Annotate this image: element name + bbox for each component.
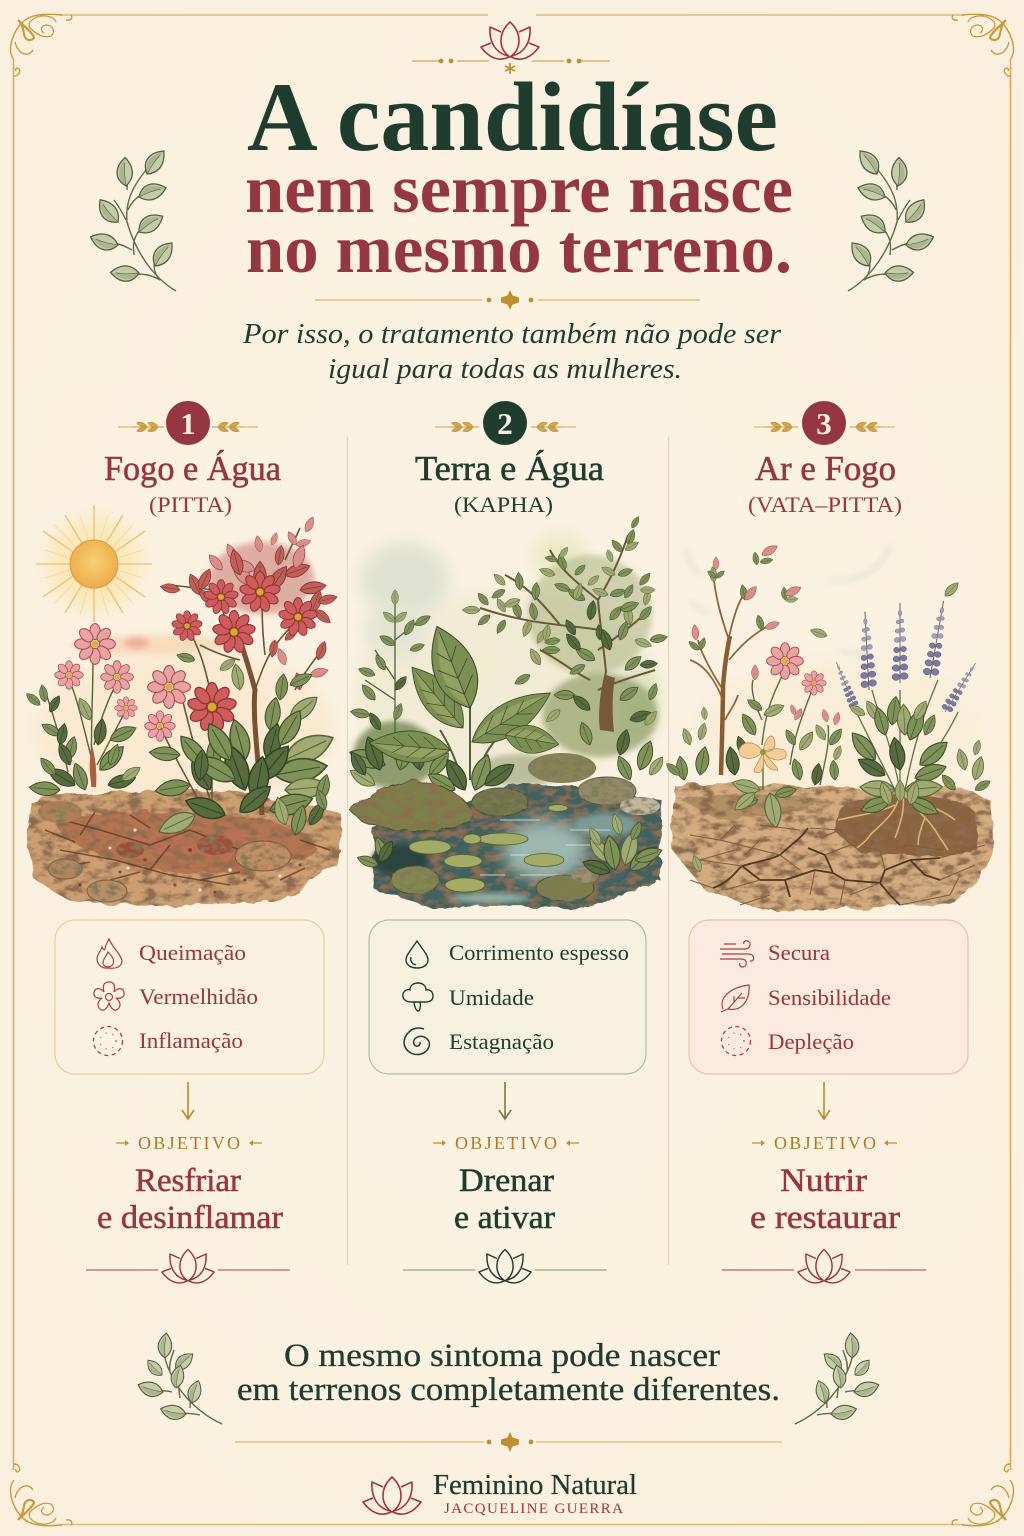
symptom text: Inflamação bbox=[139, 1028, 243, 1053]
objective text: e restaurar bbox=[750, 1200, 900, 1236]
icon: dotted circle bbox=[722, 1026, 750, 1056]
symptom text: Umidade bbox=[449, 985, 534, 1010]
panel: Fogo e Água bbox=[24, 401, 996, 1517]
symptoms box bbox=[689, 920, 968, 1074]
lily pads bbox=[409, 804, 568, 892]
roots bbox=[838, 795, 955, 850]
arrow bbox=[499, 1082, 511, 1119]
objective text bbox=[97, 1163, 283, 1236]
logo icon bbox=[363, 1477, 421, 1514]
number badge 2: 2 bbox=[497, 406, 513, 441]
illustration: hot red soil with sun and red flowers bbox=[24, 505, 342, 906]
panel: Ar e Fogo bbox=[137, 401, 996, 1517]
subheading: (PITTA) bbox=[149, 492, 232, 517]
icon: wind bbox=[720, 941, 754, 967]
closing statement: O mesmo sintoma pode nascer bbox=[284, 1338, 720, 1374]
objective text: Drenar bbox=[459, 1163, 554, 1199]
objective label: OBJETIVO bbox=[138, 1133, 240, 1153]
objective text bbox=[750, 1163, 900, 1236]
number badge 1 bbox=[118, 401, 258, 445]
symptoms box bbox=[369, 920, 646, 1074]
number badge 3 bbox=[754, 401, 895, 445]
left plant bbox=[24, 624, 143, 797]
symptoms box bbox=[55, 920, 324, 1074]
subheading: (VATA–PITTA) bbox=[748, 492, 902, 517]
lotus divider bbox=[403, 1250, 607, 1283]
heading: Fogo e Água bbox=[104, 449, 281, 488]
title divider bbox=[315, 290, 700, 310]
wind wisps bbox=[685, 545, 890, 654]
objective text: Nutrir bbox=[780, 1163, 867, 1199]
icon: cloud bbox=[403, 983, 433, 1011]
illustration: cracked dry soil with lavender bbox=[664, 543, 996, 910]
sun bbox=[36, 505, 152, 622]
number badge 3: 3 bbox=[816, 406, 832, 441]
icon: drop bbox=[406, 941, 428, 968]
arrow bbox=[818, 1082, 830, 1119]
arrow bbox=[182, 1082, 194, 1119]
objective label bbox=[116, 1133, 262, 1153]
symptom text: Depleção bbox=[768, 1029, 854, 1054]
subtitle: Por isso, o tratamento também não pode ser bbox=[242, 318, 782, 350]
sprig: bottom left bbox=[137, 1333, 222, 1424]
subtitle bbox=[242, 318, 782, 385]
symptom text: Vermelhidão bbox=[139, 984, 258, 1009]
author name: JACQUELINE GUERRA bbox=[444, 1501, 623, 1517]
heading: Terra e Água bbox=[415, 449, 604, 488]
panel: Terra e Água bbox=[137, 401, 996, 1517]
icon: dotted circle bbox=[94, 1026, 122, 1056]
symptom text: Corrimento espesso bbox=[449, 940, 629, 965]
big leaves bbox=[368, 619, 561, 796]
symptom text: Estagnação bbox=[449, 1029, 554, 1054]
fern bbox=[347, 590, 453, 790]
number badge 2 bbox=[435, 401, 576, 445]
symptom text: Queimação bbox=[139, 940, 246, 965]
number badge 1: 1 bbox=[180, 406, 196, 441]
footer divider bbox=[235, 1432, 782, 1452]
closing statement: em terrenos completamente diferentes. bbox=[237, 1372, 780, 1408]
flowering tree bbox=[145, 515, 338, 840]
rocks and moss bbox=[352, 753, 660, 901]
subheading: (KAPHA) bbox=[454, 492, 553, 517]
back foliage bbox=[353, 555, 658, 789]
title: nem sempre nasce bbox=[245, 151, 793, 227]
flowering plants bbox=[731, 643, 845, 829]
illustration: pond with lush plants bbox=[347, 515, 668, 908]
objective label: OBJETIVO bbox=[455, 1133, 557, 1153]
objective text: e ativar bbox=[454, 1200, 555, 1236]
lavender bbox=[832, 599, 992, 819]
subtitle: igual para todas as mulheres. bbox=[328, 353, 682, 385]
icon: flower bbox=[94, 982, 124, 1010]
sprig: right of title bbox=[848, 146, 935, 291]
tree bbox=[462, 515, 668, 782]
top lotus ornament bbox=[412, 22, 610, 74]
objective label bbox=[433, 1133, 579, 1153]
logo bbox=[363, 1469, 637, 1517]
slender tree bbox=[664, 543, 803, 781]
symptom text: Sensibilidade bbox=[768, 985, 891, 1010]
objective text: Resfriar bbox=[135, 1163, 241, 1199]
soil bbox=[28, 789, 342, 906]
objective text bbox=[454, 1163, 555, 1236]
column dividers bbox=[348, 437, 668, 1265]
lotus divider bbox=[86, 1250, 290, 1283]
brand name: Feminino Natural bbox=[433, 1469, 637, 1501]
water plants bbox=[356, 812, 664, 878]
title: A candidíase bbox=[247, 63, 778, 172]
symptom text: Secura bbox=[768, 940, 830, 965]
objective text: e desinflamar bbox=[97, 1200, 283, 1236]
sprig: bottom right bbox=[795, 1333, 880, 1424]
icon: flame bbox=[97, 939, 122, 968]
windblown leaves bbox=[690, 580, 961, 873]
title: no mesmo terreno. bbox=[246, 211, 792, 287]
objective label: OBJETIVO bbox=[774, 1133, 876, 1153]
heading: Ar e Fogo bbox=[755, 449, 896, 488]
title bbox=[245, 63, 793, 287]
closing statement bbox=[237, 1338, 780, 1408]
sprig: left of title bbox=[89, 146, 176, 291]
soil bbox=[672, 784, 996, 910]
icon: spiral bbox=[404, 1028, 429, 1055]
icon: leaf bbox=[721, 985, 749, 1012]
pond bbox=[372, 785, 662, 908]
lotus divider bbox=[722, 1250, 926, 1283]
